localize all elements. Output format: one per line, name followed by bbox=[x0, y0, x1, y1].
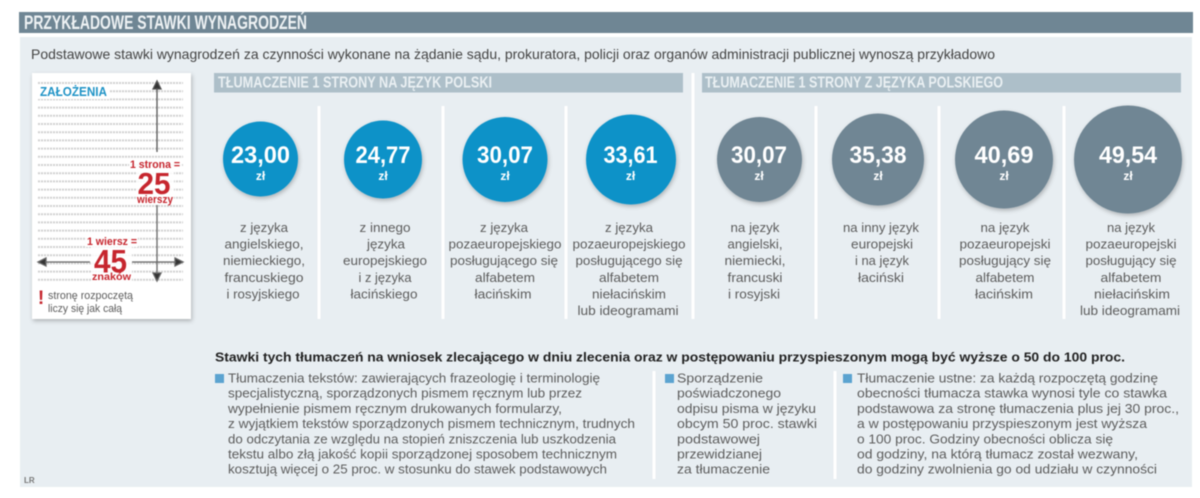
label: na język bbox=[980, 220, 1030, 235]
text block: odpis pisma: odpisu pisma w języku bbox=[677, 401, 816, 416]
label: z innego bbox=[360, 220, 410, 235]
rate: 24,77 zł: 24,77 bbox=[356, 142, 410, 169]
rate: 30,07 zł: zł bbox=[500, 169, 510, 183]
label: na język bbox=[730, 220, 780, 235]
subheading: z języka polskiego: TŁUMACZENIE 1 STRONY Z JĘZYKA POLSKIEGO bbox=[705, 74, 1003, 92]
label: pozaeuropejskiego bbox=[448, 237, 562, 252]
text block: tłumaczenie ustne: do godziny zwolnienia go od udziału w czynności bbox=[857, 462, 1157, 477]
panel: assumptions page bbox=[32, 73, 191, 319]
text block: tłumaczenia tekstów bbox=[215, 370, 635, 477]
intro text: Podstawowe stawki wynagrodzeń za czynności wykonane na żądanie sądu, prokuratora, policji oraz organów administracji publicznej wynoszą przykładowo bbox=[31, 46, 995, 62]
arrow: horizontal right bbox=[132, 258, 183, 266]
text block: odpis pisma: podstawowej bbox=[677, 431, 760, 446]
text block: tłumaczenia tekstów: z wyjątkiem tekstów sporządzonych pismem technicznym, trudnych bbox=[228, 416, 635, 431]
label: języka bbox=[366, 237, 406, 252]
label: łacińskim bbox=[975, 286, 1033, 301]
label: alfabetem bbox=[599, 270, 659, 285]
label: na język bbox=[1107, 220, 1155, 235]
text block: tłumaczenie ustne: podstawowa za stronę tłumaczenia plus jej 30 proc., bbox=[857, 401, 1179, 416]
label: łaciński bbox=[858, 270, 904, 285]
rate: 23,00 zł bbox=[223, 122, 305, 301]
label: łacińskiego bbox=[350, 286, 418, 301]
label bbox=[343, 220, 427, 301]
heading: założenia: ZAŁOŻENIA bbox=[40, 84, 107, 99]
label: łacińskim bbox=[474, 286, 532, 301]
rate: 49,54 zł: 49,54 bbox=[1099, 142, 1158, 169]
label: niełacińskim bbox=[1094, 286, 1170, 301]
rate: 33,61 zł bbox=[572, 114, 686, 318]
text block: odpis pisma bbox=[665, 370, 817, 477]
text block: odpis pisma: przewidzianej bbox=[677, 446, 762, 462]
note: stronę rozpoczętą: liczy się jak całą bbox=[48, 303, 123, 315]
label: pozaeuropejski bbox=[960, 237, 1051, 252]
rate: 40,69 zł bbox=[955, 110, 1053, 301]
label: i rosyjski bbox=[728, 286, 780, 301]
label bbox=[572, 220, 686, 318]
label: lub ideogramami bbox=[578, 303, 679, 318]
title bar: PRZYKŁADOWE STAWKI WYNAGRODZEŃ bbox=[24, 11, 307, 34]
label: angielski, bbox=[728, 237, 782, 252]
text block: tłumaczenie ustne: Tłumaczenie ustne: za każdą rozpoczętą godzinę bbox=[857, 370, 1158, 386]
rate: 33,61 zł: zł bbox=[626, 169, 636, 183]
callout: 1 wiersz = 45 znaków bbox=[86, 235, 138, 283]
label: niemieckiego, bbox=[223, 253, 305, 268]
note: stronę rozpoczętą bbox=[38, 288, 134, 315]
subheading: z języka polskiego bbox=[702, 73, 1181, 92]
rate: 30,07 zł bbox=[448, 117, 562, 301]
label: niełacińskim bbox=[592, 286, 666, 301]
text block: tłumaczenia tekstów: tekstu albo złą jakość kopii sporządzonej sposobem technicznym bbox=[228, 446, 617, 462]
text block: tłumaczenie ustne: od godziny, na którą tłumacz został wezwany, bbox=[857, 446, 1138, 462]
label bbox=[448, 220, 562, 301]
label bbox=[223, 220, 305, 301]
arrow: horizontal left bbox=[38, 258, 90, 266]
note: stronę rozpoczętą: ! bbox=[38, 288, 44, 309]
rate: 30,07 zł bbox=[717, 117, 802, 301]
rate: 30,07 zł: 30,07 bbox=[731, 142, 787, 169]
callout: 1 strona = 25 wierszy: 1 strona = bbox=[130, 159, 180, 171]
column dividers bbox=[319, 73, 1064, 479]
title bar bbox=[19, 11, 1193, 34]
text block: tłumaczenia tekstów: Tłumaczenia tekstów: zawierających frazeologię i terminologię bbox=[228, 370, 600, 386]
arrow: vertical bottom bbox=[153, 205, 161, 281]
callout: 1 wiersz = 45 znaków: 45 bbox=[94, 244, 127, 280]
rate: 24,77 zł bbox=[343, 120, 427, 301]
text block: tłumaczenia tekstów: specjalistyczną, sporządzonych pismem ręcznym lub przez bbox=[228, 386, 582, 401]
label bbox=[959, 220, 1051, 301]
rate: 35,38 zł: 35,38 bbox=[850, 142, 906, 169]
rate: 40,69 zł: 40,69 bbox=[974, 142, 1034, 169]
text block: tłumaczenie ustne bbox=[843, 370, 1179, 477]
label: pozaeuropejski bbox=[1086, 237, 1177, 252]
label: z języka bbox=[240, 220, 289, 235]
label: europejski bbox=[851, 237, 913, 252]
credit: LR bbox=[24, 476, 35, 485]
label: posługujący się bbox=[959, 253, 1051, 268]
label: alfabetem bbox=[1100, 270, 1162, 285]
label: i z języka bbox=[358, 270, 412, 285]
label: posługującego się bbox=[576, 253, 682, 268]
rate: 30,07 zł: zł bbox=[754, 169, 764, 183]
label: niemiecki, bbox=[724, 253, 786, 268]
label: posługujący się bbox=[1086, 253, 1176, 268]
text block: tłumaczenie ustne: obecności tłumacza stawka wynosi tyle co stawka bbox=[857, 386, 1168, 401]
label: z języka bbox=[480, 220, 529, 235]
rate: 49,54 zł: zł bbox=[1123, 169, 1133, 183]
label: na inny język bbox=[843, 220, 919, 235]
text block: tłumaczenia tekstów: kosztują więcej o 25 proc. w stosunku do stawek podstawowych bbox=[228, 462, 607, 477]
callout: 1 strona = 25 wierszy bbox=[129, 158, 181, 206]
label: angielskiego, bbox=[224, 237, 304, 252]
rate: 40,69 zł: zł bbox=[999, 169, 1009, 183]
text block: odpis pisma: Sporządzenie bbox=[677, 370, 763, 386]
label: francuskiego bbox=[224, 270, 304, 285]
label: posługującego się bbox=[450, 253, 558, 268]
label: europejskiego bbox=[343, 253, 427, 268]
arrow: vertical top bbox=[153, 81, 161, 152]
rate: 23,00 zł: zł bbox=[256, 169, 266, 183]
label: francuski bbox=[728, 270, 783, 285]
rate: 24,77 zł: zł bbox=[378, 169, 388, 183]
subheading: na język polski: TŁUMACZENIE 1 STRONY NA JĘZYK POLSKI bbox=[218, 74, 492, 92]
bold note: Stawki tych tłumaczeń na wniosek zlecającego w dniu zlecenia oraz w postępowaniu przyspieszonym mogą być wyższe o 50 do 100 proc. bbox=[215, 350, 1125, 364]
rate: 30,07 zł: 30,07 bbox=[477, 142, 533, 169]
rate: 49,54 zł bbox=[1074, 106, 1182, 318]
label bbox=[724, 220, 786, 301]
label: alfabetem bbox=[475, 270, 535, 285]
note: stronę rozpoczętą: stronę rozpoczętą bbox=[48, 290, 134, 302]
text block: tłumaczenia tekstów: wypełnienie pismem ręcznym drukowanych formularzy, bbox=[227, 401, 562, 416]
rate: 23,00 zł: 23,00 bbox=[231, 142, 290, 169]
text block: tłumaczenie ustne: o 100 proc. Godziny obecności oblicza się bbox=[857, 431, 1113, 446]
callout: 1 wiersz = 45 znaków: 1 wiersz = bbox=[87, 236, 137, 248]
label: z języka bbox=[605, 220, 654, 235]
callout: 1 strona = 25 wierszy: 25 bbox=[138, 166, 170, 201]
label bbox=[1080, 220, 1180, 318]
text block: tłumaczenia tekstów: do odczytania ze względu na stopień zniszczenia lub uszkodzenia bbox=[228, 431, 617, 446]
text block: odpis pisma: poświadczonego bbox=[677, 386, 781, 401]
text block: odpis pisma: za tłumaczenie bbox=[677, 462, 770, 477]
label: lub ideogramami bbox=[1080, 303, 1180, 318]
label bbox=[843, 220, 919, 285]
subheading: na język polski bbox=[214, 73, 683, 92]
rate: 35,38 zł bbox=[832, 114, 924, 285]
callout: 1 strona = 25 wierszy: wierszy bbox=[136, 194, 174, 206]
label: i rosyjskiego bbox=[226, 286, 300, 301]
label: pozaeuropejskiego bbox=[572, 237, 686, 252]
text block: tłumaczenie ustne: a w postępowaniu przyspieszonym jest wyższa bbox=[857, 416, 1148, 431]
text block: odpis pisma: obcym 50 proc. stawki bbox=[677, 416, 817, 431]
rate: 35,38 zł: zł bbox=[873, 169, 883, 183]
callout: 1 wiersz = 45 znaków: znaków bbox=[92, 271, 132, 283]
label: alfabetem bbox=[976, 270, 1034, 285]
rate: 33,61 zł: 33,61 bbox=[604, 142, 658, 169]
label: i na język bbox=[855, 253, 909, 268]
